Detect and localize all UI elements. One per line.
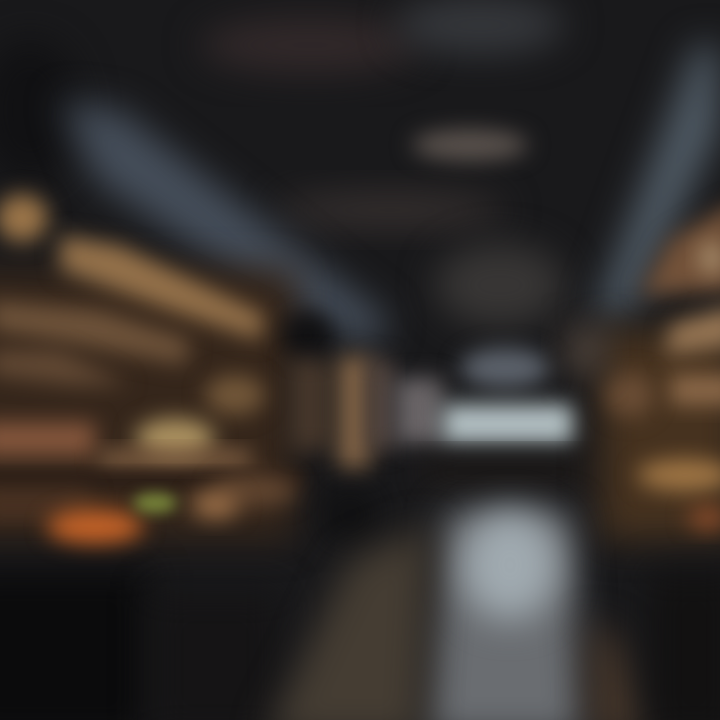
ceiling: dark beams and muted lights [0,0,565,388]
light streak: right diagonal [592,45,720,318]
left shelves: warm tan bands [0,194,300,545]
light streak: left diagonal [60,100,390,350]
floor: dark with bright reflection [0,510,720,720]
right shelves: warm tan bands [565,200,720,540]
back window: bright light [395,378,590,486]
central figure and pillar [284,313,392,541]
